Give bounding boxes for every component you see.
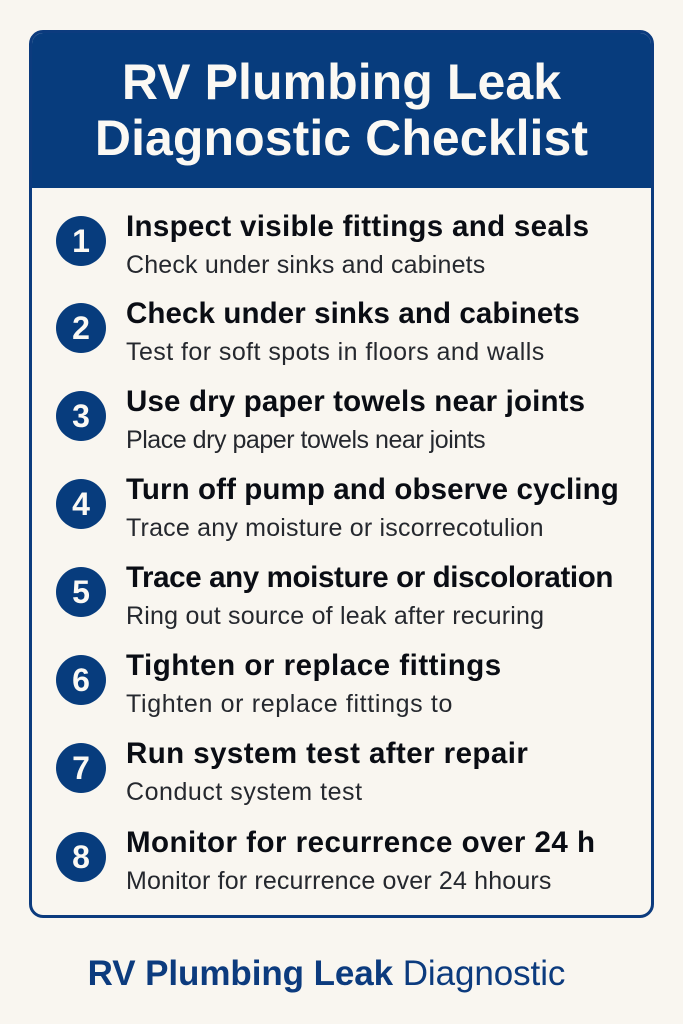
step 2	[56, 297, 580, 366]
step 4	[56, 473, 619, 542]
step 1: Inspect visible fittings and seals	[126, 210, 589, 243]
step 1: 1	[72, 223, 90, 259]
step 6: Tighten or replace fittings	[126, 649, 502, 682]
step 7	[56, 737, 528, 806]
step 4: 4	[72, 486, 90, 522]
step 1	[56, 210, 589, 279]
step 6: 6	[72, 662, 90, 698]
panel: checklist card	[29, 30, 654, 918]
step 3	[56, 385, 585, 454]
step 5	[56, 561, 613, 630]
step 8: Monitor for recurrence over 24 hhours	[126, 867, 552, 895]
step 2: 2	[72, 310, 90, 346]
step 2: Check under sinks and cabinets	[126, 297, 580, 330]
step 6: Tighten or replace fittings to	[126, 690, 453, 718]
step 3: 3	[72, 398, 90, 434]
step 7: Conduct system test	[126, 778, 363, 806]
step 2: Test for soft spots in floors and walls	[126, 338, 545, 366]
title	[29, 30, 654, 188]
step 5: Trace any moisture or discoloration	[126, 561, 613, 594]
step 3: Place dry paper towels near joints	[126, 426, 485, 454]
step 4: Trace any moisture or iscorrecotulion	[126, 514, 544, 542]
step 1: Check under sinks and cabinets	[126, 251, 485, 279]
step 6	[56, 649, 502, 718]
title: RV Plumbing Leak	[122, 54, 561, 110]
step 5: 5	[72, 574, 90, 610]
step 3: Use dry paper towels near joints	[126, 385, 585, 418]
step 5: Ring out source of leak after recuring	[126, 602, 544, 630]
step 8: 8	[72, 839, 90, 875]
step 8: Monitor for recurrence over 24 h	[126, 826, 595, 859]
step 8	[56, 826, 595, 895]
step 7: Run system test after repair	[126, 737, 528, 770]
footer caption: RV Plumbing Leak Diagnostic	[88, 954, 565, 993]
step 7: 7	[72, 750, 90, 786]
title: Diagnostic Checklist	[95, 110, 588, 166]
step 4: Turn off pump and observe cycling	[126, 473, 619, 506]
